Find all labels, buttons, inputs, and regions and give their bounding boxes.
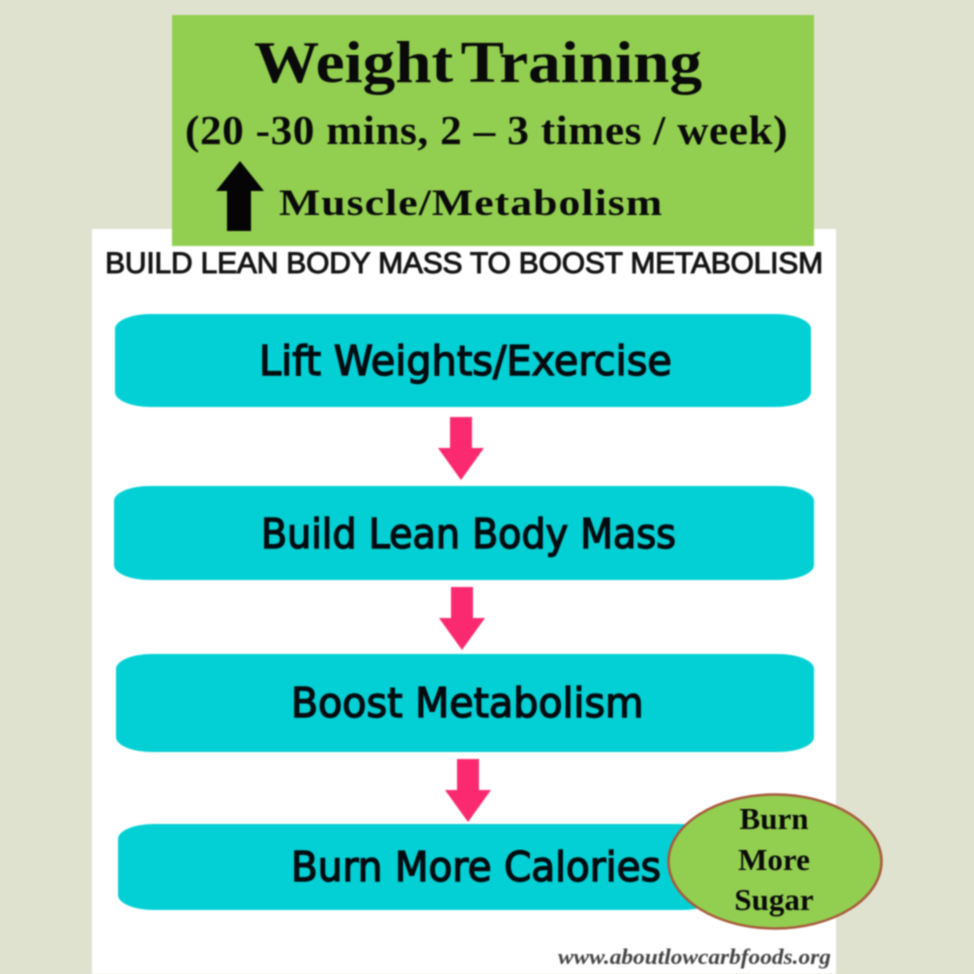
box: Lift Weights/Exercise (115, 314, 811, 407)
box: Boost Metabolism: Boost Metabolism (291, 679, 644, 727)
subtitle: BUILD LEAN BODY MASS TO BOOST METABOLISM (105, 247, 823, 280)
website credit: www.aboutlowcarbfoods.org (558, 944, 831, 969)
panel: white background (92, 229, 836, 974)
arrow: step 2 to 3 (438, 586, 486, 650)
box: Burn More Calories (118, 824, 718, 910)
text: callout label: Burn (740, 801, 808, 836)
callout: Burn More Sugar (666, 792, 884, 931)
arrow: step 1 to 2 (438, 416, 484, 480)
text: callout label: Sugar (734, 882, 814, 917)
box: Boost Metabolism (116, 654, 814, 752)
text: duration and frequency: (20 -30 mins, 2 – 3 times / week) (185, 107, 788, 153)
text: callout label (734, 801, 814, 918)
text: callout label: More (738, 842, 810, 876)
icon: up arrow (216, 160, 264, 232)
box: Build Lean Body Mass (114, 486, 814, 580)
box: Burn More Calories: Burn More Calories (291, 843, 661, 891)
text: muscle and metabolism: Muscle/Metabolism (279, 183, 663, 224)
box: Lift Weights/Exercise: Lift Weights/Exercise (259, 337, 672, 385)
box: Build Lean Body Mass: Build Lean Body Mass (261, 510, 676, 558)
arrow: step 3 to 4 (444, 758, 492, 822)
heading: Weight Training: Weight Training (254, 29, 702, 95)
panel: weight training header (172, 15, 814, 246)
